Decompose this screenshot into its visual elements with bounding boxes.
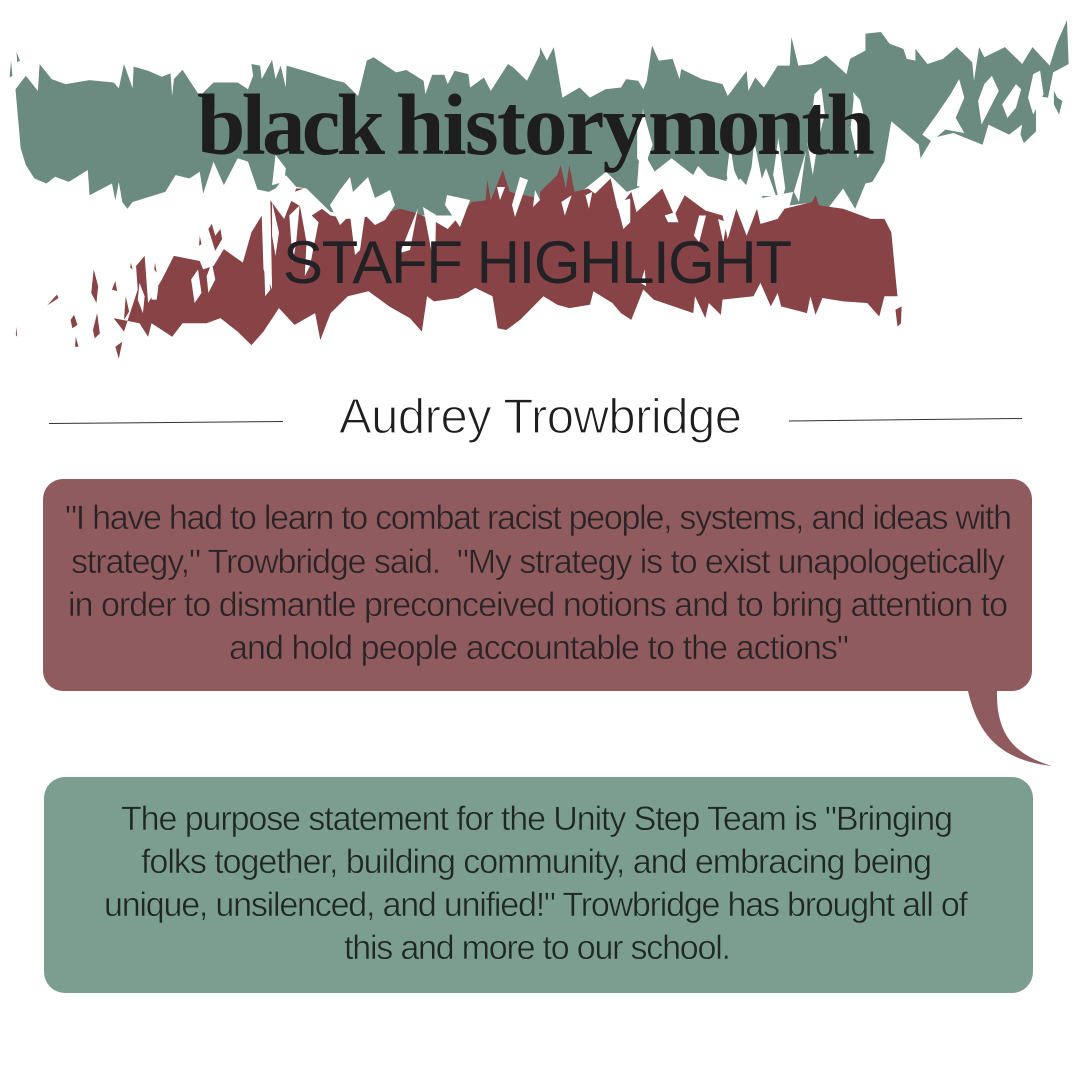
subtitle: STAFF HIGHLIGHT — [283, 229, 792, 296]
purpose text — [104, 800, 969, 967]
panel: quote speech bubble — [43, 479, 1052, 766]
red brush flecks left — [16, 224, 222, 359]
title: month — [648, 76, 875, 173]
title: black — [197, 76, 386, 173]
panel: purpose statement — [44, 777, 1033, 993]
quote text: and hold people accountable to the actions" — [229, 629, 849, 667]
purpose text: folks together, building community, and embracing being — [141, 843, 932, 881]
green brush flecks top left — [10, 52, 1062, 114]
purpose text: unique, unsilenced, and unified!" Trowbridge has brought all of — [104, 886, 969, 924]
white spikes under title right — [637, 92, 866, 196]
red brush flecks right — [895, 306, 902, 327]
quote text — [65, 499, 1012, 667]
quote text: "I have had to learn to combat racist people, systems, and ideas with — [65, 499, 1012, 537]
green brush stroke — [10, 20, 1069, 215]
quote text: in order to dismantle preconceived notions and to bring attention to — [68, 586, 1008, 624]
title — [197, 76, 875, 173]
purpose text: The purpose statement for the Unity Step Team is "Bringing — [121, 800, 953, 838]
title: history — [396, 76, 646, 173]
white spikes above subtitle — [283, 177, 540, 270]
quote text: strategy," Trowbridge said. "My strategy is to exist unapologetically — [71, 543, 1005, 581]
white gaps in red brush — [138, 192, 727, 313]
name heading: Audrey Trowbridge — [339, 390, 742, 444]
white gaps in green brush — [238, 71, 1044, 205]
red brush stroke — [16, 165, 902, 359]
purpose text: this and more to our school. — [344, 929, 731, 967]
